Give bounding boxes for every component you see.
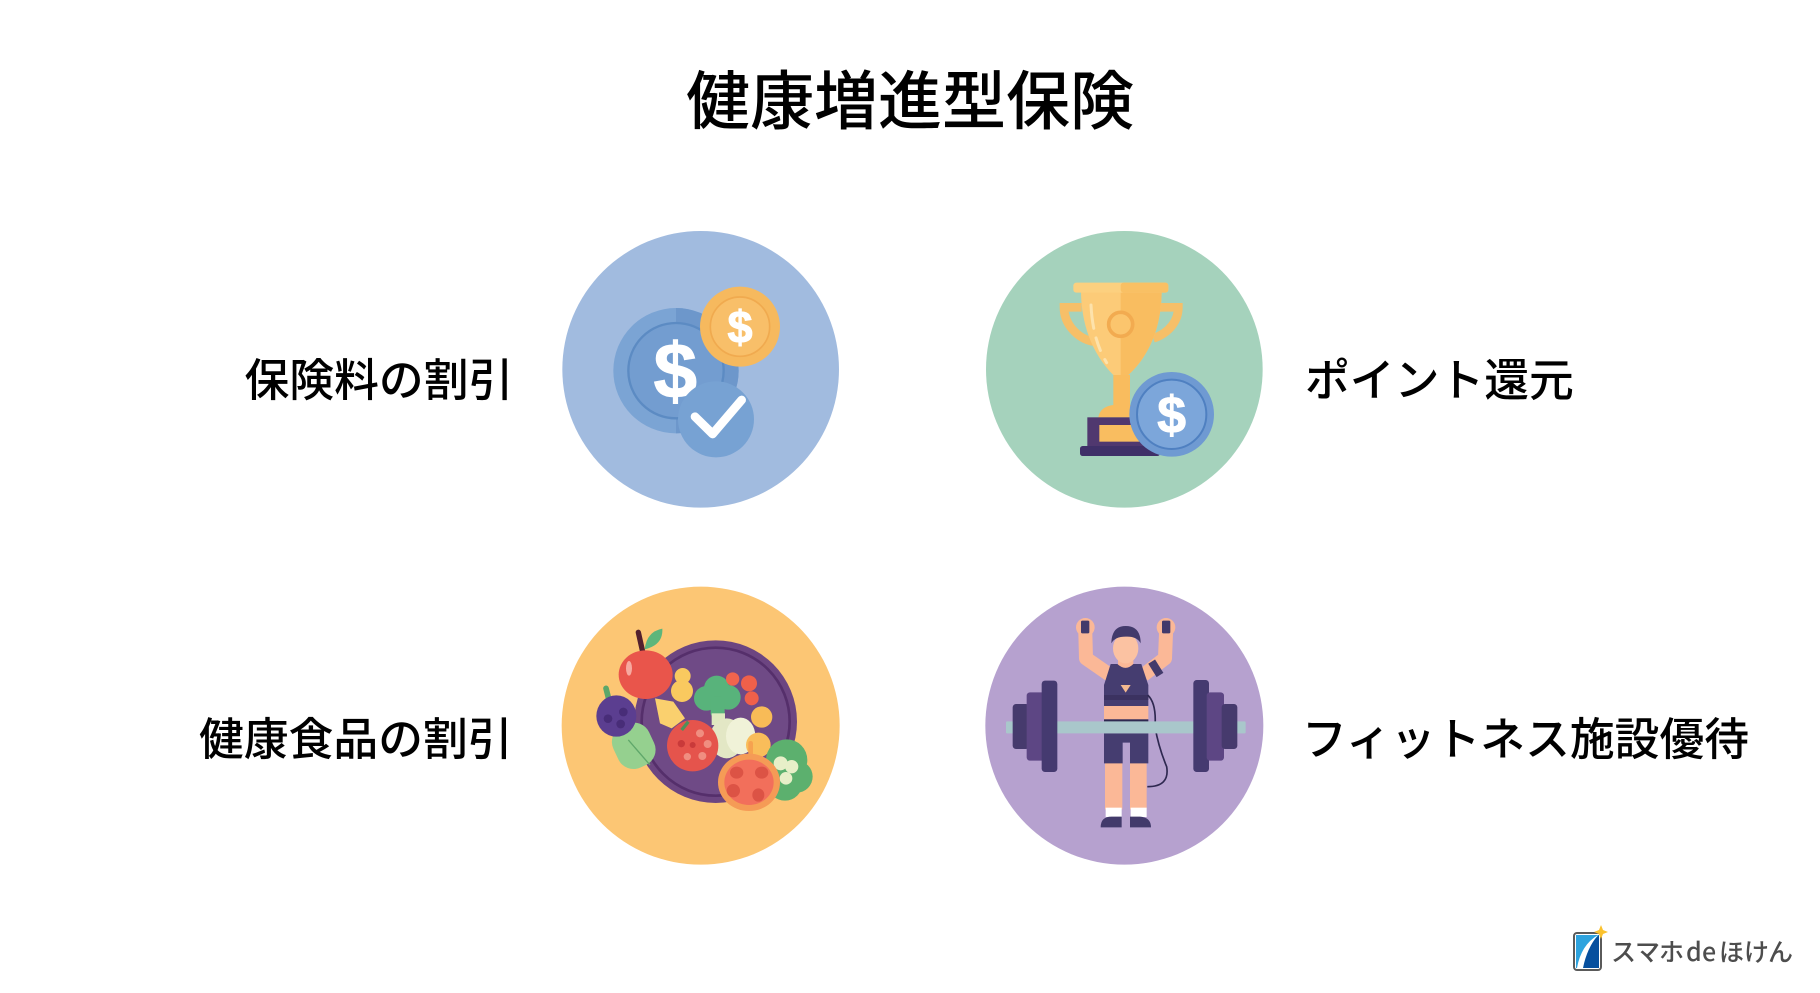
label: point reward: ポイント還元 (1305, 344, 1574, 409)
icon: plate of healthy food (562, 587, 840, 865)
icon: coins with check (562, 231, 839, 508)
label: premium discount: 保険料の割引 (244, 344, 513, 409)
label: healthy food discount: 健康食品の割引 (199, 703, 513, 768)
icon: trophy with coin (986, 231, 1263, 508)
label: fitness benefits: フィットネス施設優待 (1302, 703, 1749, 768)
title: 健康増進型保険 (686, 51, 1134, 143)
icon: coins with check: $ (654, 327, 697, 415)
logo (1574, 925, 1793, 970)
icon: trophy with coin: $ (1157, 386, 1186, 444)
logo text: スマホdeほけん (1611, 933, 1793, 969)
icon: coins with check: $ (727, 302, 753, 353)
logo mark (1574, 925, 1608, 970)
icon: person with barbell (985, 587, 1263, 865)
